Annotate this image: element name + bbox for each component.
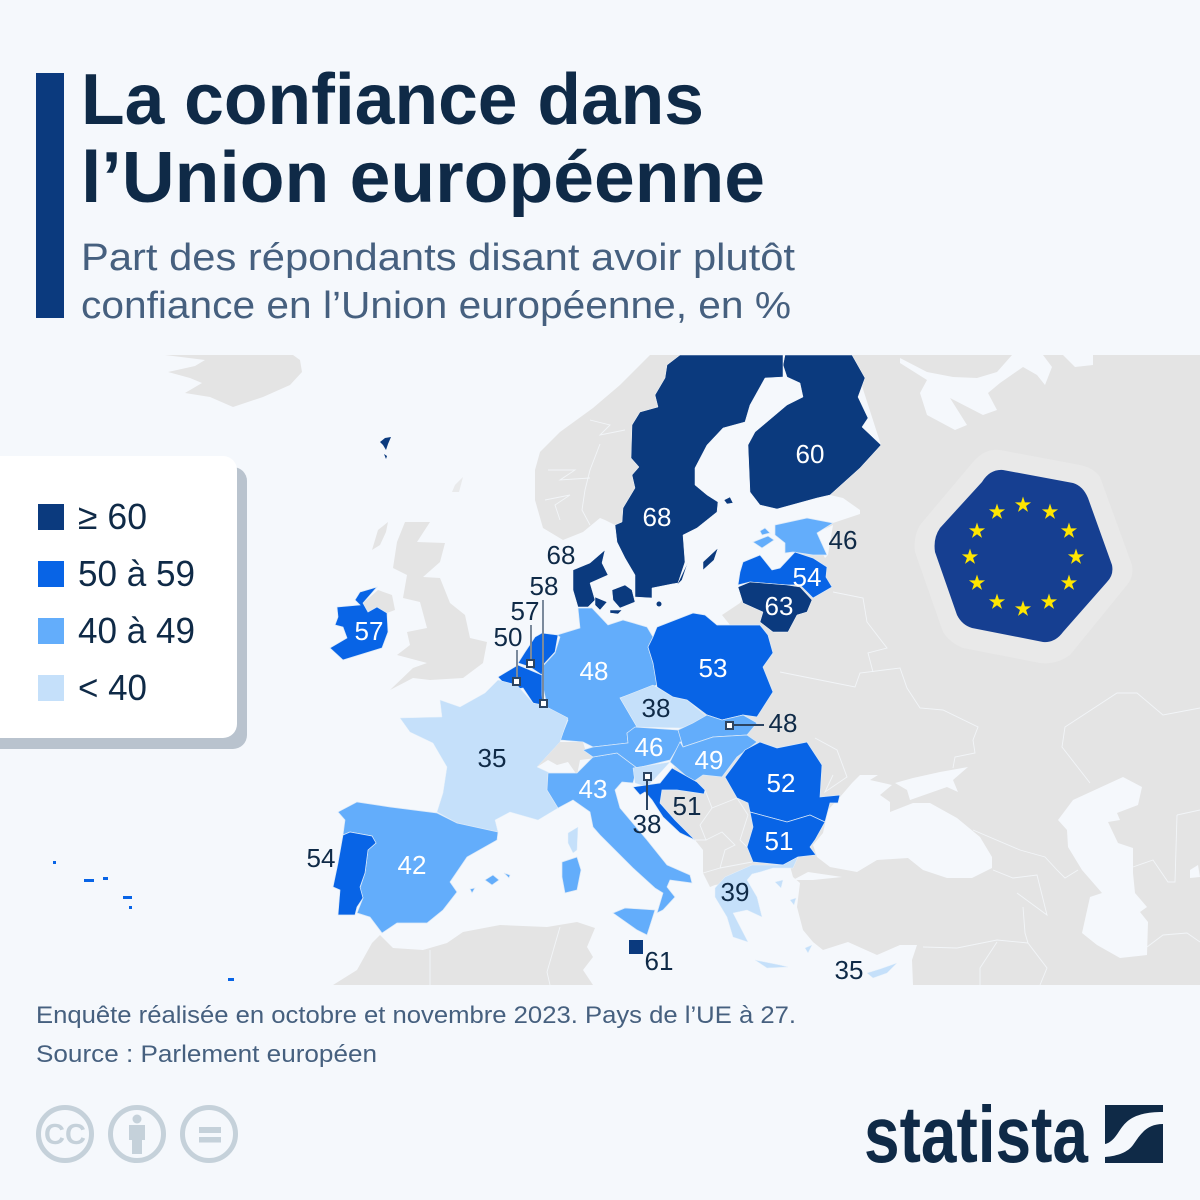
value labels: 35	[835, 955, 863, 985]
callout markers	[513, 660, 733, 780]
country: Luxembourg, 58	[538, 693, 544, 707]
value labels: 46	[829, 525, 857, 555]
legend item: 40 to 49: 40 à 49	[78, 610, 195, 651]
country: Finland, 60	[748, 355, 881, 509]
title: La confiance dans	[81, 60, 704, 140]
country: Belgium, 50	[498, 665, 543, 707]
map of Europe	[53, 355, 1200, 985]
country: Bulgaria, 51	[747, 812, 825, 865]
country: Spain, 42	[338, 802, 510, 933]
value labels: 49	[695, 745, 723, 775]
value labels: 54	[793, 562, 821, 592]
country: Italy, 43	[547, 753, 692, 935]
value labels: 58	[530, 571, 558, 601]
seas and lakes	[793, 355, 1200, 958]
country: Switzerland	[538, 742, 592, 772]
legend panel	[0, 456, 247, 749]
country: Netherlands, 57	[518, 633, 558, 675]
value labels: 35	[478, 743, 506, 773]
value labels: 50	[494, 622, 522, 652]
icon: EU flag hexagon	[915, 450, 1132, 663]
legend item: 60 and over	[38, 496, 147, 537]
value labels: 68	[547, 540, 575, 570]
country: Hungary, 49	[670, 735, 757, 782]
value labels: 38	[633, 809, 661, 839]
country: Austria, 46	[583, 727, 682, 768]
icon: creative commons	[38, 1108, 92, 1160]
country: Latvia, 54	[738, 552, 832, 598]
Azores and Madeira	[53, 861, 234, 981]
non-EU land	[165, 355, 1200, 985]
country: Sweden, 68	[615, 355, 783, 598]
legend item: 50 to 59: 50 à 59	[78, 553, 195, 594]
country: France, 35	[400, 680, 578, 853]
value labels: 57	[355, 616, 383, 646]
country: Ireland, 57	[330, 587, 388, 660]
Faroe Islands	[380, 437, 391, 459]
non-EU borders	[430, 420, 1200, 985]
value labels: 46	[635, 732, 663, 762]
country: Czechia, 38	[620, 685, 707, 728]
legend item: 60 and over: ≥ 60	[78, 496, 147, 537]
value labels: 42	[398, 850, 426, 880]
logo: statista: statista	[864, 1090, 1088, 1179]
country: Greece, 39	[715, 857, 812, 968]
value labels: 68	[643, 502, 671, 532]
country: Croatia, 51	[633, 768, 705, 840]
country: Slovakia, 48	[678, 715, 757, 747]
country: Malta, 61	[629, 940, 643, 954]
country: Poland, 53	[648, 613, 773, 720]
value labels: 38	[642, 693, 670, 723]
country: Slovenia, 38	[633, 762, 670, 787]
icon: no derivatives	[182, 1108, 236, 1160]
value labels: 48	[769, 708, 797, 738]
value labels: 61	[645, 946, 673, 976]
country: Portugal, 54	[333, 832, 376, 915]
subtitle: Part des répondants disant avoir plutôt	[81, 237, 795, 279]
title accent bar	[36, 73, 64, 318]
title: l’Union européenne	[81, 138, 765, 218]
value labels: 51	[765, 826, 793, 856]
country: Romania, 52	[725, 742, 840, 822]
value labels: 48	[580, 656, 608, 686]
country: Germany, 48	[542, 608, 657, 747]
value labels: 54	[307, 843, 335, 873]
value labels	[307, 439, 863, 985]
subtitle	[81, 237, 795, 327]
legend item: under 40: < 40	[78, 667, 147, 708]
value labels: 43	[579, 774, 607, 804]
icon: creative commons: CC	[44, 1119, 86, 1151]
country: Lithuania, 63	[738, 582, 812, 632]
callout leader lines	[517, 600, 764, 810]
country: Estonia, 46	[753, 518, 833, 555]
country: Cyprus, 35	[867, 963, 897, 978]
value labels: 51	[673, 791, 701, 821]
footnote and source: Source : Parlement européen	[36, 1041, 377, 1068]
country: Denmark, 68	[573, 550, 662, 614]
value labels: 53	[699, 653, 727, 683]
legend item: under 40	[38, 667, 147, 708]
icon: attribution	[110, 1108, 164, 1160]
footnote and source: Enquête réalisée en octobre et novembre 2023. Pays de l’UE à 27.	[36, 1002, 796, 1029]
value labels: 63	[765, 591, 793, 621]
value labels: 57	[511, 596, 539, 626]
footnote and source	[36, 1002, 796, 1068]
Swedish islands	[677, 497, 733, 585]
value labels: 39	[721, 877, 749, 907]
value labels: 60	[796, 439, 824, 469]
value labels: 52	[767, 768, 795, 798]
subtitle: confiance en l’Union européenne, en %	[81, 285, 791, 327]
title	[81, 60, 765, 218]
